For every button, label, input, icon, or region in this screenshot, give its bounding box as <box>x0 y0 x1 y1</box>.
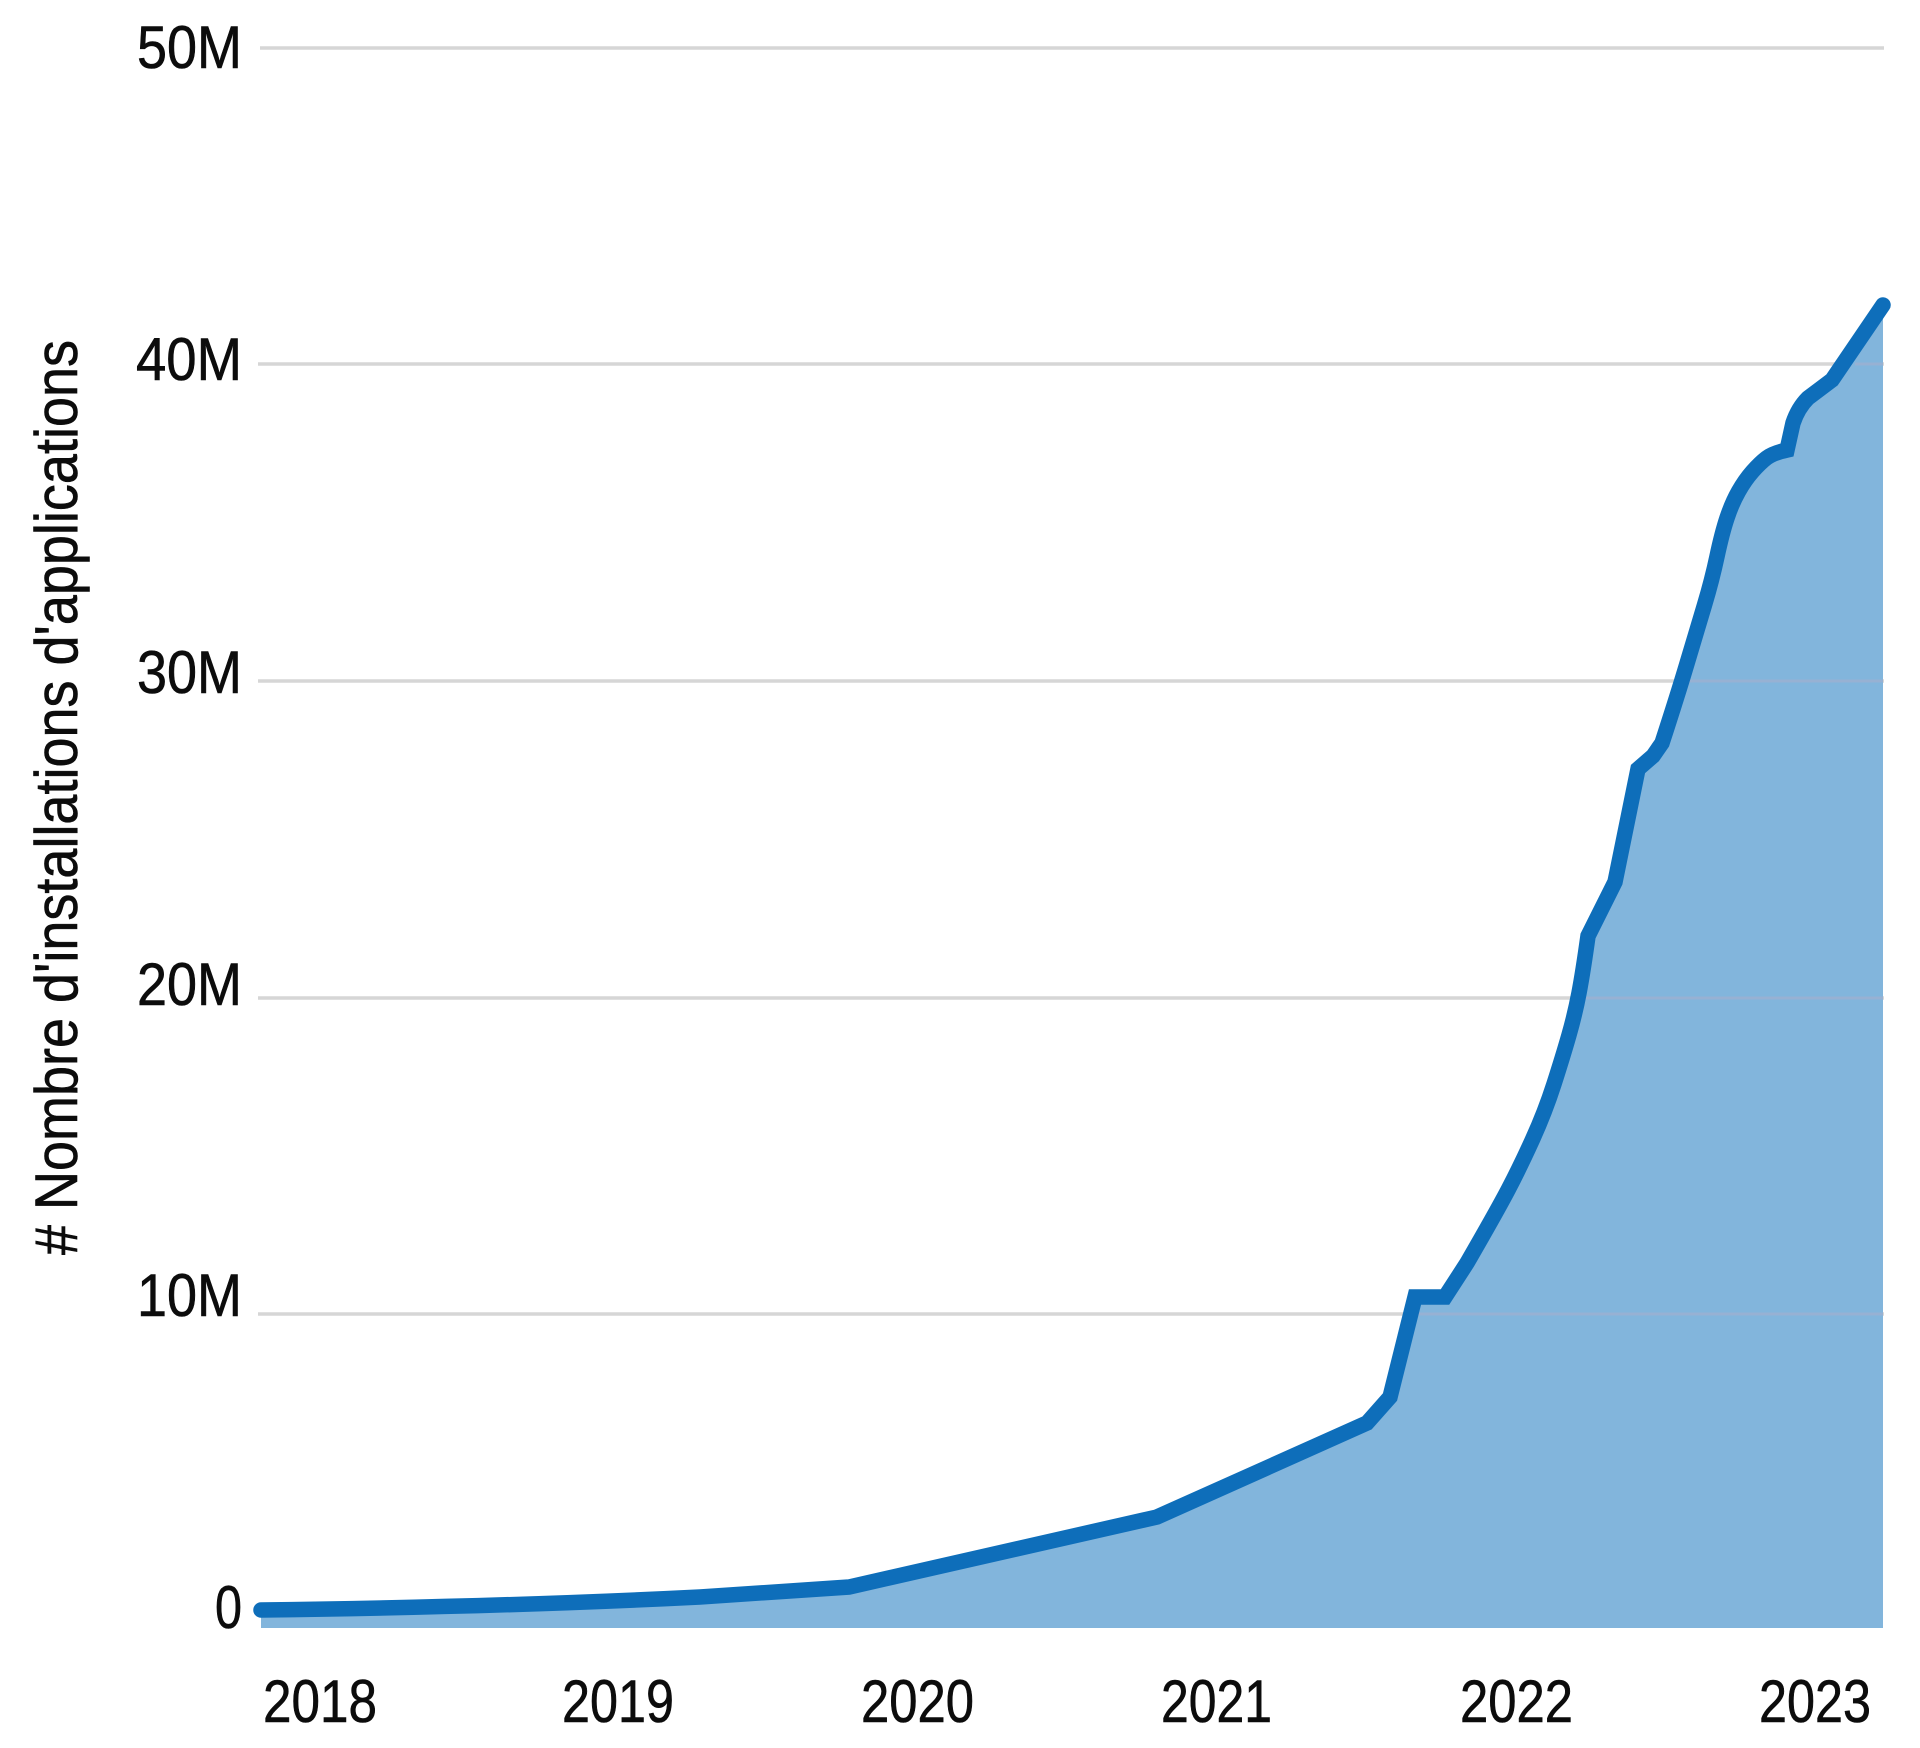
y-axis tick labels: 0 <box>215 1574 242 1641</box>
y-axis tick labels: 20M <box>137 951 242 1018</box>
y-axis tick labels: 40M <box>136 326 242 393</box>
x-axis year labels: 2021 <box>1161 1668 1272 1735</box>
x-axis year labels: 2018 <box>263 1668 377 1735</box>
area fill under curve <box>261 305 1883 1628</box>
y-axis tick labels: 10M <box>137 1262 242 1329</box>
y-axis title: # Nombre d'installations d'applications <box>23 340 90 1255</box>
y-axis tick labels <box>136 14 242 1641</box>
x-axis year labels: 2019 <box>562 1668 674 1735</box>
installs trend line <box>261 305 1883 1610</box>
x-axis year labels: 2020 <box>861 1668 974 1735</box>
y-axis tick labels: 50M <box>137 14 242 81</box>
x-axis year labels <box>263 1668 1871 1735</box>
gridlines <box>258 48 1884 1314</box>
y-axis tick labels: 30M <box>137 639 242 706</box>
x-axis year labels: 2022 <box>1460 1668 1573 1735</box>
gridlines seen through the fill <box>1412 364 1883 1314</box>
x-axis year labels: 2023 <box>1759 1668 1871 1735</box>
